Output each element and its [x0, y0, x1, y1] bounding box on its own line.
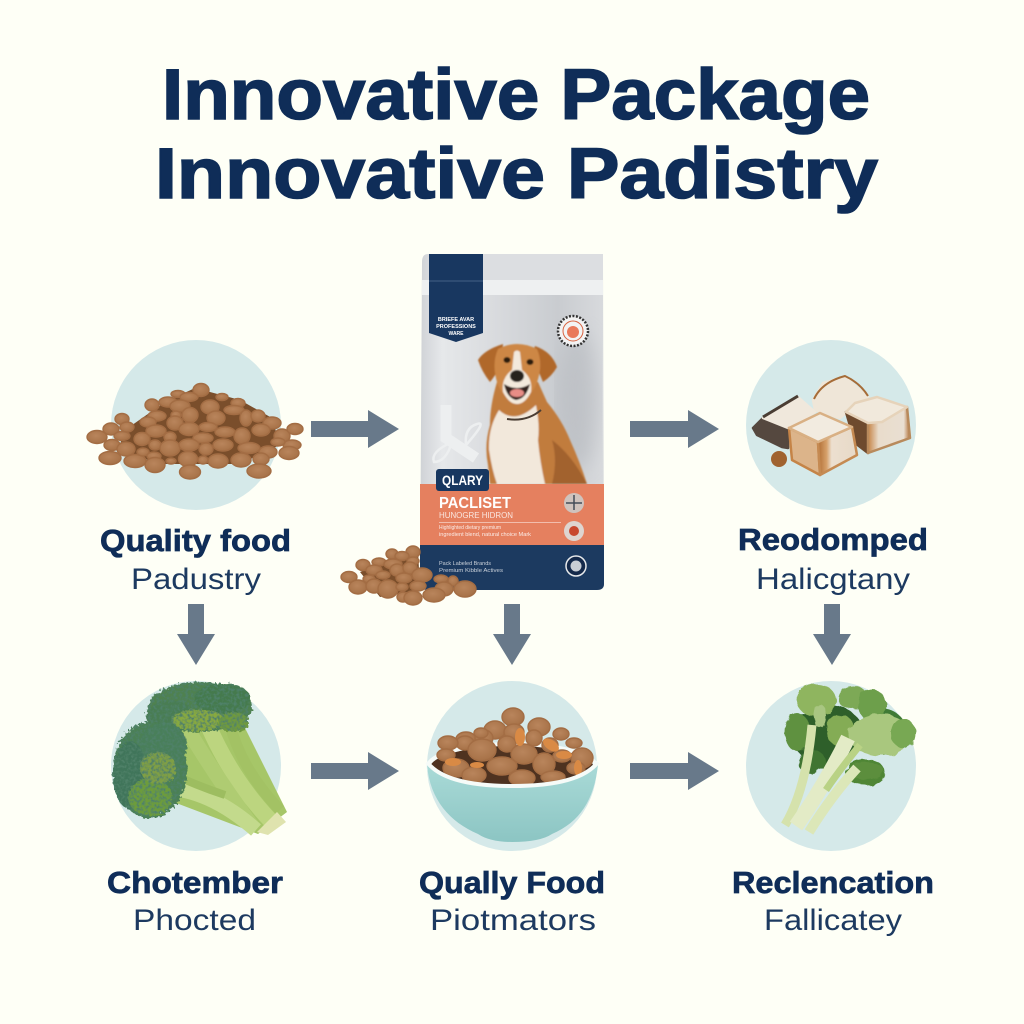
base text	[439, 561, 504, 574]
back chunk	[813, 376, 868, 418]
base text: Pack Labeled Brands	[439, 561, 492, 567]
arrow: down left	[177, 604, 215, 665]
circle backdrop	[111, 681, 281, 851]
orange band icons	[564, 493, 584, 541]
panel: quality food kibble	[87, 340, 303, 510]
product sub text: ingredient blend, natural choice Mark	[439, 532, 531, 538]
tab	[429, 254, 483, 342]
circle backdrop	[746, 681, 916, 851]
circle backdrop	[427, 681, 597, 851]
zip	[422, 280, 603, 295]
top floret	[146, 682, 252, 732]
leaves	[785, 684, 915, 780]
orange band	[420, 484, 604, 545]
stem ends	[257, 812, 286, 835]
lower floret	[113, 722, 187, 818]
label: qually food: Qually Food	[419, 865, 605, 900]
small nut	[771, 451, 787, 467]
tab text	[436, 317, 476, 337]
product sub text: Highlighted dietary premium	[439, 525, 501, 531]
label: reodomped: Reodomped	[738, 522, 928, 557]
blaze and muzzle	[503, 350, 531, 404]
label: quality food: Quality food	[100, 523, 291, 558]
arrow: down center	[493, 604, 531, 665]
base text: Premium Kibble Actives	[439, 568, 504, 574]
right ear	[532, 346, 557, 382]
bowl inside	[430, 746, 594, 790]
label: quality food	[100, 523, 291, 596]
dog body	[486, 382, 587, 484]
panel: chunks	[746, 340, 916, 510]
tab seal line	[429, 280, 483, 282]
label: qually food	[419, 865, 605, 937]
bowl front	[427, 765, 598, 842]
stem mass	[155, 728, 287, 834]
arrow: package to chunks	[630, 410, 719, 448]
label: reodomped	[738, 522, 928, 596]
bowl rim	[427, 762, 598, 786]
mouth	[504, 384, 530, 400]
orange kibble bits	[445, 728, 582, 776]
broccoli stems	[155, 725, 280, 830]
kibble pile	[87, 384, 303, 479]
spilled kibble	[341, 546, 476, 605]
product sub text	[439, 511, 561, 538]
arrow: broccoli to bowl	[311, 752, 399, 790]
top seal	[483, 254, 603, 280]
right chunk	[846, 397, 910, 453]
label: chotember	[107, 865, 283, 937]
label: qually food: Piotmators	[430, 904, 596, 937]
navy base	[420, 545, 604, 590]
badge: QLARY	[442, 472, 484, 488]
dog fur flank	[552, 440, 587, 484]
panel: leafy greens	[746, 681, 916, 851]
circle backdrop	[746, 340, 916, 510]
label: reodomped: Halicgtany	[756, 563, 910, 596]
title: Innovative Package	[162, 56, 870, 135]
panel: broccoli	[111, 681, 287, 851]
arrow: bowl to leaves	[630, 752, 719, 790]
circle backdrop	[111, 340, 281, 510]
collar	[507, 410, 541, 420]
label: reclencation: Fallicatey	[764, 904, 902, 937]
dog	[478, 344, 587, 484]
label: chotember: Phocted	[133, 904, 256, 937]
front chunk	[789, 413, 857, 475]
title: Innovative Padistry	[155, 135, 879, 214]
tab text: WARE	[448, 331, 464, 337]
panel: bowl of food	[426, 681, 598, 851]
back dark leaves	[792, 705, 906, 785]
left ear	[478, 344, 503, 382]
head	[494, 344, 540, 402]
tab text: BRIEFE AVAR	[438, 317, 474, 323]
eyes	[504, 357, 510, 363]
label: reclencation: Reclencation	[732, 865, 934, 900]
product name: PACLISET	[439, 495, 511, 512]
tongue	[510, 389, 524, 397]
white logo mark	[433, 405, 481, 462]
title	[155, 56, 879, 214]
seal badge	[558, 316, 588, 346]
nose	[510, 370, 524, 382]
dark chunk	[753, 396, 815, 448]
dog chest	[489, 405, 545, 484]
bowl back rim	[426, 742, 598, 790]
package	[341, 254, 604, 605]
label: chotember: Chotember	[107, 865, 283, 900]
bowl food	[437, 708, 593, 786]
label: quality food: Padustry	[131, 563, 261, 596]
product sub text: HUNOGRE HIDRON	[439, 511, 513, 520]
arrow: down right	[813, 604, 851, 665]
badge	[436, 469, 489, 491]
arrow: kibble to package	[311, 410, 399, 448]
shading	[558, 330, 598, 470]
bag body	[420, 254, 604, 590]
base icon	[566, 556, 586, 576]
tab text: PROFESSIONS	[436, 324, 476, 330]
label: reclencation	[732, 865, 934, 937]
stems	[785, 725, 860, 832]
